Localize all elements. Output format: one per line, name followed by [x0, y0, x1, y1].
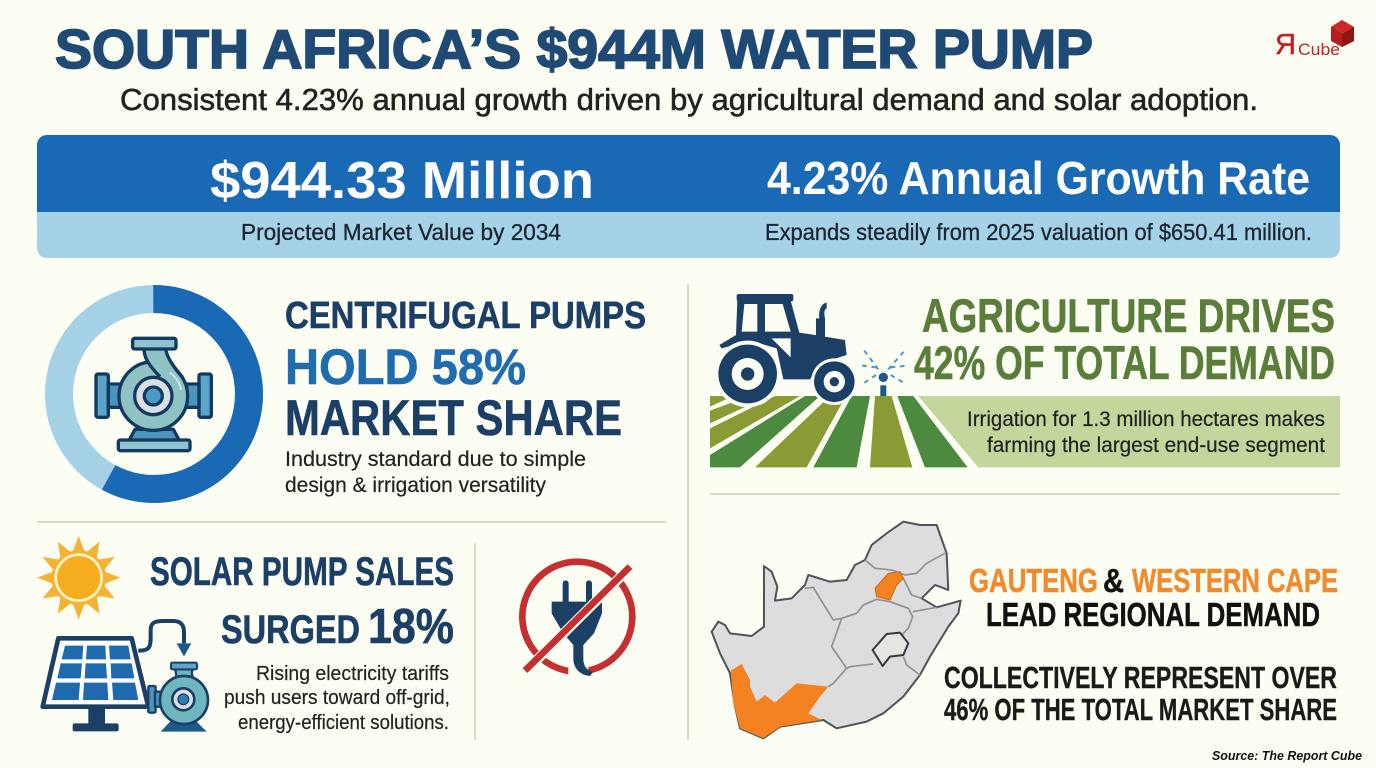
stat: over 46% of market share [944, 660, 1337, 727]
body text: irrigation: farming the largest end-use segment [987, 434, 1325, 457]
stat: hold 58%: HOLD 58% [285, 339, 526, 395]
icon: centrifugal pump [96, 338, 211, 451]
body text: solar: energy-efficient solutions. [238, 712, 449, 734]
panel: regional demand [712, 522, 1338, 738]
icon: sprinkler [860, 348, 909, 396]
body text: irrigation [967, 408, 1325, 457]
heading: Gauteng and Western Cape [969, 562, 1338, 599]
icon: tractor [714, 294, 858, 407]
panel: solar pumps [37, 536, 632, 734]
logo: RCube: Cube [1298, 41, 1340, 59]
panel: agriculture [710, 289, 1340, 467]
heading: centrifugal pumps: CENTRIFUGAL PUMPS [285, 295, 646, 337]
KPI banner [37, 135, 1340, 258]
heading: solar pump sales: SOLAR PUMP SALES [150, 550, 454, 594]
KPI caption: growth: Expands steadily from 2025 valuation of $650.41 million. [765, 219, 1312, 245]
body text: solar [224, 663, 450, 734]
field illustration [710, 396, 1340, 467]
heading: Gauteng and Western Cape: GAUTENG [969, 562, 1098, 599]
icon: solar panel with pipe and pump [43, 621, 208, 732]
body text: solar: Rising electricity tariffs [256, 663, 449, 685]
subtitle: Consistent 4.23% annual growth driven by agricultural demand and solar adoption. [120, 82, 1258, 117]
KPI caption: market value: Projected Market Value by 2034 [241, 219, 561, 245]
stat: surged 18% [221, 600, 454, 654]
body text: centrifugal: design & irrigation versatility [285, 474, 546, 497]
map: South Africa provinces [712, 522, 961, 738]
body text: centrifugal: Industry standard due to simple [285, 448, 586, 471]
stat: surged 18%: SURGED [221, 608, 360, 652]
stat: surged 18%: 18% [368, 600, 454, 654]
body text: irrigation: Irrigation for 1.3 million hectares makes [967, 408, 1325, 431]
logo: RCube: Я [1275, 29, 1296, 61]
icon: no mains plug [522, 562, 632, 677]
KPI: projected market value: $944.33 Million [210, 152, 594, 210]
logo: RCube [1275, 20, 1354, 61]
title: SOUTH AFRICA’S $944M WATER PUMP [55, 18, 1093, 80]
heading: market share: MARKET SHARE [285, 390, 622, 446]
heading: Gauteng and Western Cape: & [1103, 562, 1124, 599]
icon: sun [37, 536, 120, 619]
donut chart: 58% share [59, 299, 249, 489]
KPI: annual growth rate: 4.23% Annual Growth Rate [767, 152, 1310, 204]
panel: centrifugal pumps [59, 295, 646, 497]
body text: solar: push users toward off-grid, [224, 687, 450, 709]
source note: Source: The Report Cube [1212, 749, 1362, 763]
body text: centrifugal [285, 448, 586, 497]
